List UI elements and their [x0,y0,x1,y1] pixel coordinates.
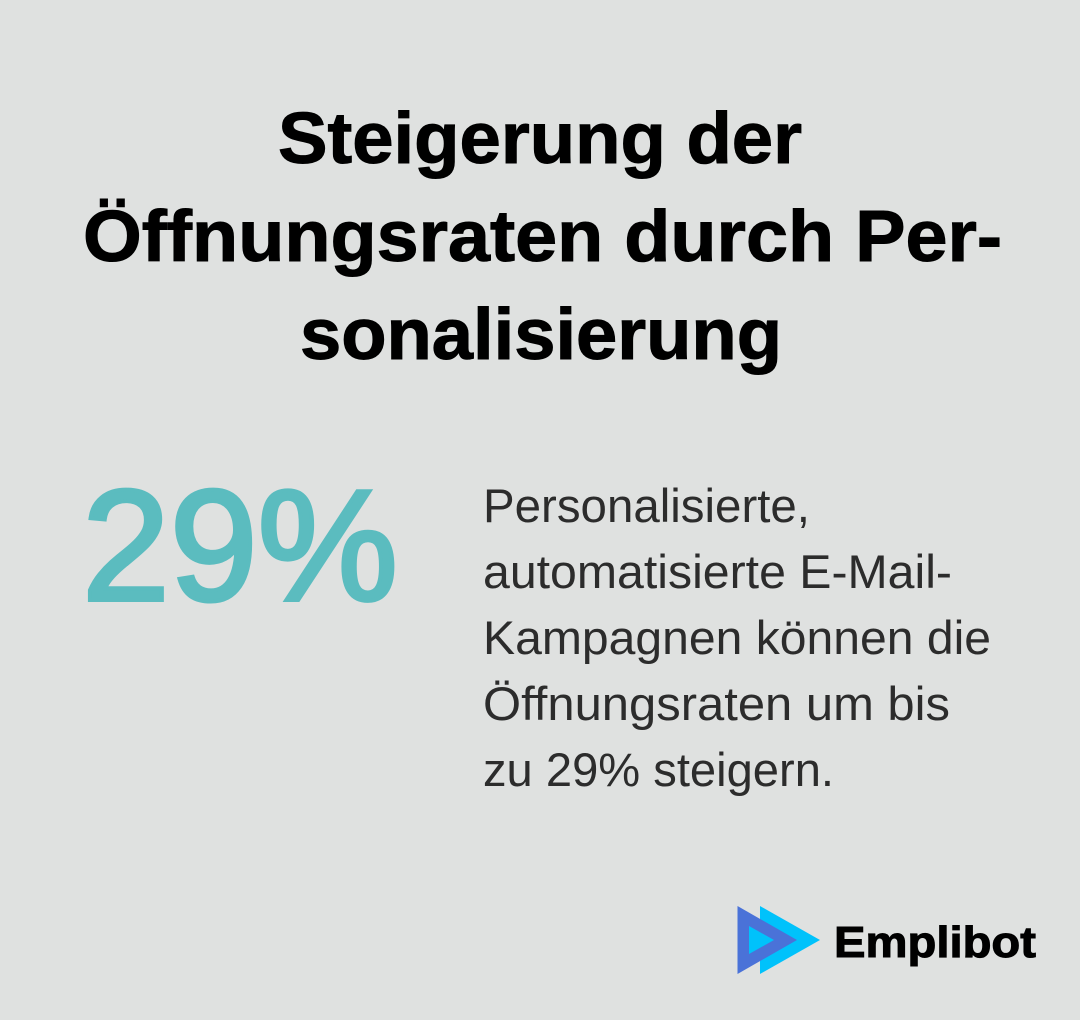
title: Steigerung der [278,99,802,179]
logo wordmark: Emplibot [834,918,1036,967]
description text: automatisierte E-Mail- [483,545,952,598]
logo: Emplibot [738,906,1036,974]
title: sonalisierung [300,295,782,375]
description text [483,479,991,796]
icon: play triangles [738,906,820,974]
description text: zu 29% steigern. [483,743,834,796]
description text: Personalisierte, [483,479,810,532]
description text: Kampagnen können die [483,611,991,664]
title [83,99,1002,375]
title: Öffnungsraten durch Per- [83,197,1002,277]
description text: Öffnungsraten um bis [483,677,950,730]
statistic: 29%: 29% [82,458,398,634]
